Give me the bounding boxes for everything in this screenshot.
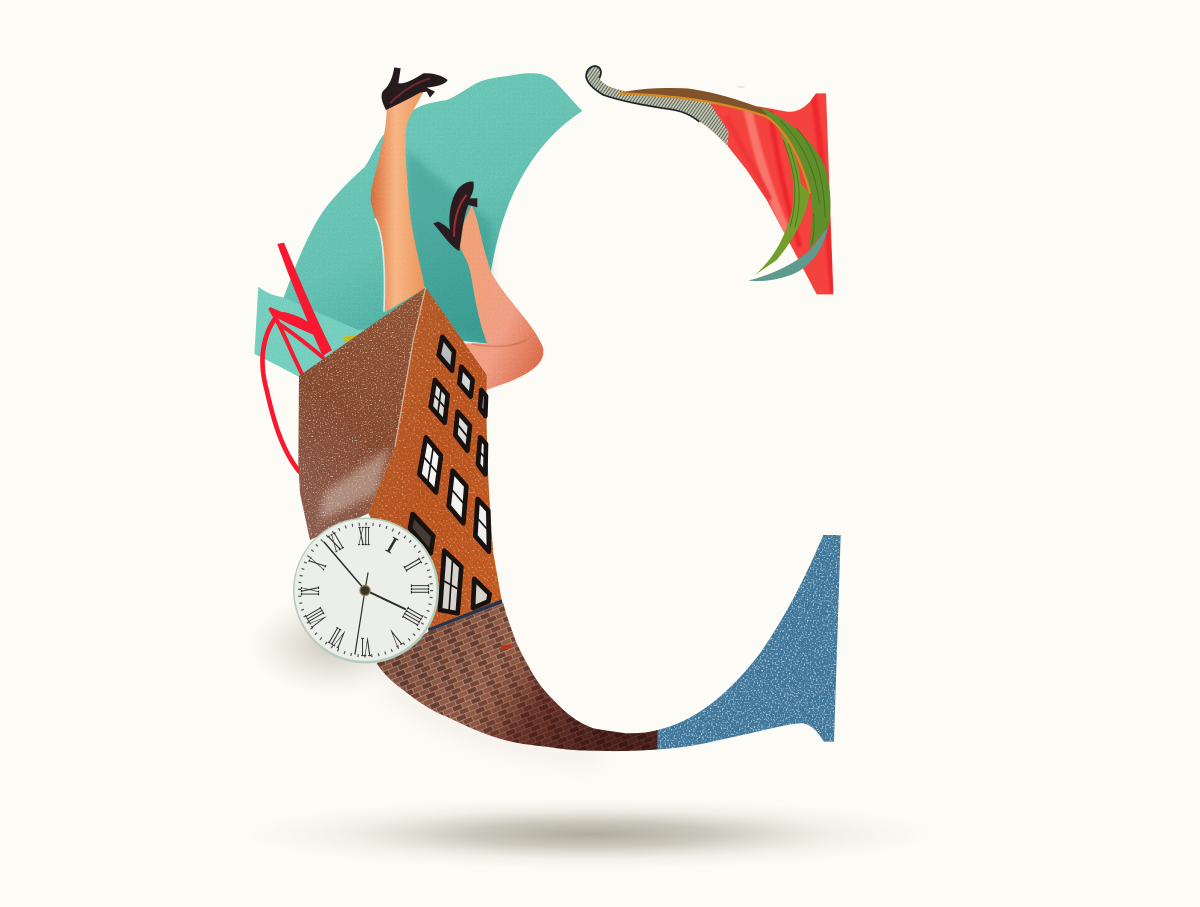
pale edge of the leg	[375, 218, 384, 312]
scribble loop	[271, 309, 323, 373]
clock hub	[360, 586, 370, 596]
bent leg shape	[460, 205, 543, 390]
roman numerals: V	[385, 623, 406, 653]
lower shoe	[433, 181, 477, 251]
fabric fold shade	[407, 150, 492, 343]
roman numerals: VIII	[299, 604, 333, 631]
brick building	[298, 287, 503, 632]
front wall	[368, 287, 502, 630]
navy ledge	[428, 599, 503, 632]
hatched grey terminal	[586, 66, 728, 146]
orange leaf vein	[618, 93, 810, 193]
window row 4	[410, 514, 490, 613]
red streaks	[727, 93, 833, 293]
roman numerals: VII	[324, 622, 351, 654]
soft shadow behind clock and letter curve	[250, 595, 600, 756]
large teal sheet	[283, 73, 582, 343]
blue-green leaf	[748, 227, 828, 281]
raised leg	[371, 67, 448, 312]
roman numerals: IX	[295, 586, 325, 596]
windows	[410, 337, 490, 613]
bent leg	[433, 181, 543, 390]
red brick accent	[501, 644, 511, 650]
weathered pale patch	[320, 447, 390, 520]
blue granite serif	[658, 535, 841, 749]
thick brush stroke	[277, 243, 332, 356]
brick shape	[377, 603, 658, 751]
letter top serif	[586, 66, 833, 294]
roman numerals: I	[382, 533, 401, 559]
teal fabric	[254, 73, 582, 380]
roman numerals: XI	[324, 527, 347, 558]
lower shoe sheen	[454, 195, 467, 237]
bottom brick wall	[377, 603, 658, 751]
ground shadow	[245, 798, 935, 870]
knee shade	[472, 340, 527, 346]
clock hands	[324, 542, 405, 654]
terminal ink outline	[586, 66, 699, 122]
window row 3	[419, 437, 489, 552]
clock case	[293, 518, 439, 664]
brick colour fade	[377, 603, 658, 751]
mortar lines on front wall	[368, 287, 502, 630]
clock dial	[294, 519, 436, 661]
inner green leaf	[755, 123, 809, 275]
collage illustration: letter C	[254, 65, 864, 862]
roman numerals: II	[398, 554, 428, 575]
roman numerals: VI	[361, 632, 371, 662]
window row 1	[439, 337, 486, 416]
long sweep stroke	[262, 320, 299, 472]
left wall	[298, 287, 426, 540]
minute ticks	[300, 524, 432, 656]
upper shoe	[382, 67, 448, 110]
lower teal flap	[254, 287, 397, 380]
window mullions	[423, 387, 489, 612]
window row 2	[431, 380, 486, 474]
red serif panel	[708, 93, 833, 294]
outer green leaf	[760, 107, 831, 250]
roman numerals: XII	[358, 521, 370, 551]
roman numerals: III	[405, 584, 435, 594]
upper shoe sheen	[390, 78, 430, 103]
leaf veins	[780, 120, 825, 245]
roman numerals: IIII	[397, 603, 429, 630]
paper speck	[737, 86, 745, 88]
red scribble	[262, 243, 332, 472]
leg shape	[371, 88, 425, 312]
roman numerals: X	[303, 553, 332, 574]
brown leaf	[618, 88, 777, 120]
roman numerals	[295, 521, 435, 662]
yellow scrap	[344, 335, 356, 342]
clock	[293, 518, 439, 664]
building corner highlight	[395, 287, 426, 447]
